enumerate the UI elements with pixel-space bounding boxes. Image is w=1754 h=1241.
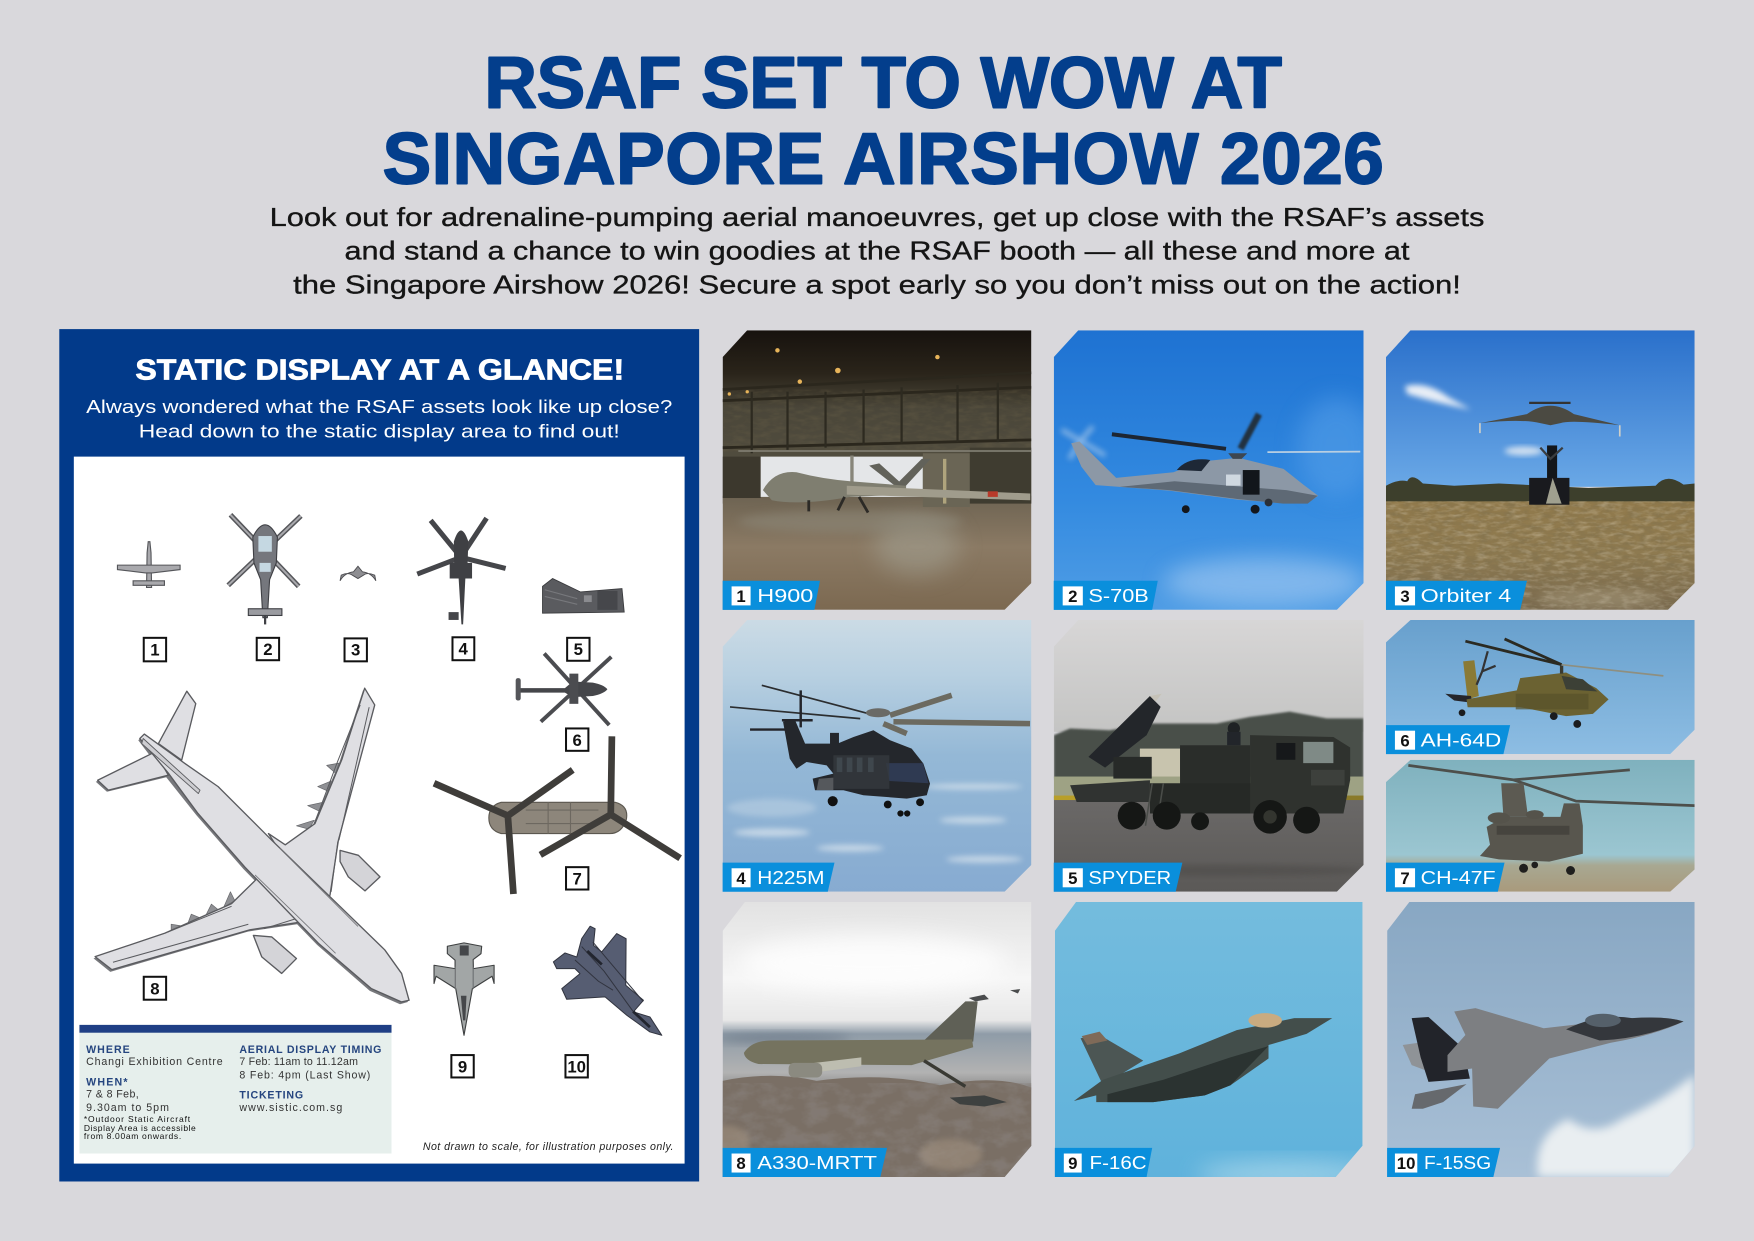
label: 1 H900: H900 (757, 585, 813, 606)
dates (86, 1089, 169, 1114)
photo: AH-64D (1386, 620, 1695, 754)
icon: A330-MRTT top view (94, 688, 409, 1004)
number 3 (345, 638, 367, 661)
photo: SPYDER (1054, 620, 1365, 892)
label: 2 S-70B: S-70B (1088, 585, 1149, 606)
engines (340, 850, 380, 891)
label: 9 F-16C: F-16C (1090, 1152, 1147, 1173)
number 2: 2 (263, 640, 273, 659)
label: 5 SPYDER (1054, 863, 1182, 892)
photo: F-16C (1055, 902, 1376, 1188)
number 5: 5 (574, 640, 583, 659)
number 2 (257, 638, 279, 660)
tailplanes (158, 691, 196, 760)
label: 3 Orbiter 4: 3 (1400, 587, 1410, 606)
photo: A330-MRTT (705, 902, 1031, 1177)
intro text: Look out for adrenaline-pumping aerial manoeuvres, get up close with the RSAF’s assets (270, 202, 1484, 232)
intro text: and stand a chance to win goodies at the RSAF booth — all these and more at (345, 236, 1410, 266)
ticketing: TICKETING (239, 1090, 303, 1102)
label: 10 F-15SG: 10 (1397, 1154, 1415, 1173)
label: 8 A330-MRTT: 8 (736, 1154, 746, 1173)
label: 4 H225M: H225M (757, 867, 824, 888)
number 8: 8 (150, 980, 160, 999)
photo: S-70B (1054, 330, 1376, 610)
label: 1 H900 (723, 581, 820, 610)
number 9: 9 (458, 1057, 467, 1076)
intro text: the Singapore Airshow 2026! Secure a spot early so you don’t miss out on the action! (293, 269, 1461, 299)
panel: static display at a glance (59, 329, 699, 1181)
white diagram area (74, 457, 685, 1164)
number 7 (566, 867, 588, 890)
title: SINGAPORE AIRSHOW 2026 (383, 119, 1384, 200)
label: 6 AH-64D (1386, 725, 1510, 754)
label: 7 CH-47F: 7 (1400, 869, 1410, 888)
footnote: *Outdoor Static Aircraft (84, 1114, 191, 1124)
website: www.sistic.com.sg (238, 1102, 342, 1114)
number 4 (452, 637, 474, 660)
panel subheading (86, 396, 672, 442)
fuselage (140, 734, 409, 1002)
photo: H225M (723, 620, 1031, 892)
label: 6 AH-64D: 6 (1400, 731, 1410, 750)
label: 5 SPYDER: SPYDER (1088, 867, 1171, 888)
icon: AH-64D top view (516, 653, 611, 725)
intro text (270, 202, 1484, 299)
panel subheading: Always wondered what the RSAF assets look like up close? (86, 396, 672, 417)
label: 4 H225M: 4 (736, 869, 746, 888)
flap fairings (171, 763, 339, 930)
venue: Changi Exhibition Centre (86, 1056, 223, 1068)
number 6 (566, 728, 588, 751)
icon: H225M top view (417, 518, 506, 624)
number 10: 10 (567, 1057, 586, 1076)
photo: CH-47F (1386, 760, 1695, 892)
label: 8 A330-MRTT: A330-MRTT (757, 1152, 877, 1173)
footnote (84, 1114, 196, 1141)
label: 3 Orbiter 4: Orbiter 4 (1421, 585, 1511, 606)
aerial display timing: AERIAL DISPLAY TIMING (239, 1044, 381, 1056)
footnote: from 8.00am onwards. (84, 1131, 181, 1141)
number 7: 7 (573, 869, 582, 888)
when: WHEN* (86, 1076, 128, 1088)
icon: H900 top view (117, 542, 180, 588)
icon: F-16C top view (434, 943, 494, 1035)
icon: F-15SG top view (553, 926, 662, 1035)
icon: CH-47F top view (434, 736, 680, 894)
panel heading: STATIC DISPLAY AT A GLANCE! (135, 354, 624, 386)
number 4: 4 (458, 640, 468, 659)
aircraft shadow (94, 690, 408, 1004)
label: 4 H225M (723, 863, 834, 892)
label: 2 S-70B: 2 (1068, 587, 1077, 606)
label: 2 S-70B (1054, 581, 1158, 610)
wings (268, 688, 375, 912)
info box (79, 1025, 392, 1154)
number 6: 6 (573, 731, 582, 750)
scale note: Not drawn to scale, for illustration purposes only. (423, 1141, 673, 1153)
number 1 (144, 638, 166, 661)
photo: Orbiter 4 (1386, 330, 1695, 610)
title: RSAF SET TO WOW AT (484, 43, 1282, 124)
number 1: 1 (150, 641, 160, 660)
panel subheading: Head down to the static display area to find out! (139, 421, 620, 442)
photo: H900 (723, 330, 1031, 610)
photo: F-15SG (1387, 902, 1695, 1177)
icon: S-70B top view (228, 515, 301, 624)
label: 6 AH-64D: AH-64D (1421, 729, 1501, 750)
timings: 8 Feb: 4pm (Last Show) (239, 1070, 370, 1082)
dates: 7 & 8 Feb, (86, 1089, 139, 1101)
icon: SPYDER top view (543, 579, 624, 613)
label: 5 SPYDER: 5 (1068, 869, 1077, 888)
timings: 7 Feb: 11am to 11.12am (239, 1056, 358, 1068)
label: 3 Orbiter 4 (1386, 581, 1527, 610)
number 3: 3 (351, 641, 360, 660)
label: 9 F-16C: 9 (1068, 1154, 1077, 1173)
label: 7 CH-47F (1386, 863, 1505, 892)
label: 9 F-16C (1055, 1148, 1152, 1177)
number 5 (567, 638, 590, 661)
number 8 (144, 977, 166, 1000)
footnote: Display Area is accessible (84, 1123, 196, 1133)
icon: Orbiter 4 top view (340, 566, 376, 581)
title (383, 43, 1384, 200)
dates: 9.30am to 5pm (86, 1102, 169, 1114)
where: WHERE (86, 1044, 130, 1056)
label: 10 F-15SG (1387, 1148, 1500, 1177)
label: 10 F-15SG: F-15SG (1424, 1152, 1491, 1173)
label: 1 H900: 1 (736, 587, 746, 606)
label: 8 A330-MRTT (723, 1148, 887, 1177)
number 9 (451, 1055, 474, 1077)
label: 7 CH-47F: CH-47F (1421, 867, 1496, 888)
timings (239, 1056, 370, 1082)
